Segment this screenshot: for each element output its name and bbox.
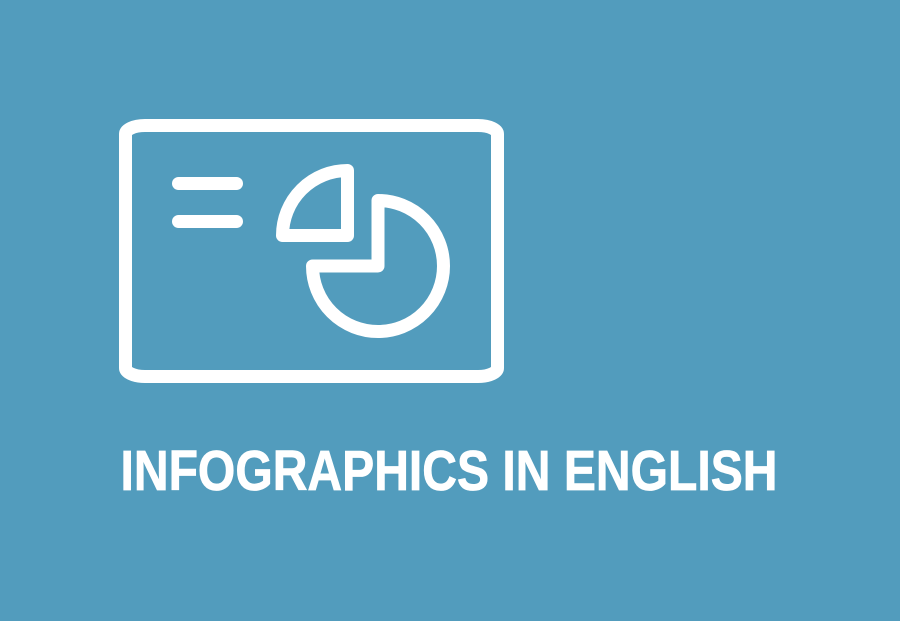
icon frame <box>126 126 498 376</box>
icon: main pie <box>312 200 444 332</box>
title: INFOGRAPHICS IN ENGLISH <box>120 439 778 503</box>
icon: text lines <box>178 184 236 222</box>
icon: detached pie slice <box>282 170 348 236</box>
icon: presentation screen with pie chart <box>126 126 498 376</box>
